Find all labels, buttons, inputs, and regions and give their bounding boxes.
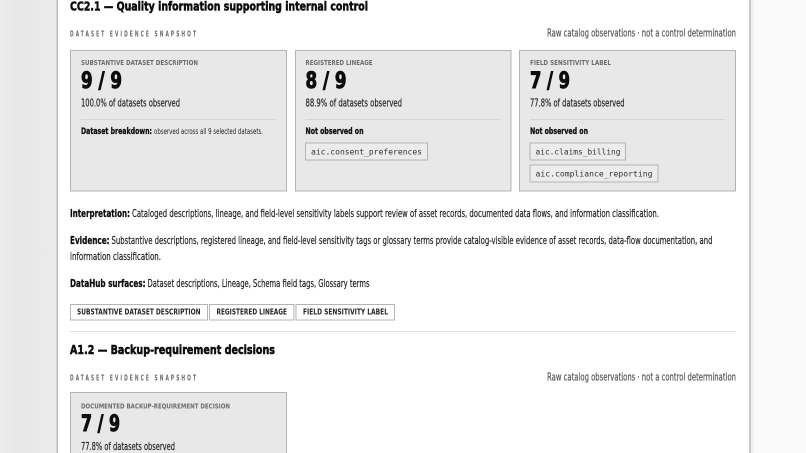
tag: registered lineage: REGISTERED LINEAGE (216, 308, 287, 316)
tag: field sensitivity label: FIELD SENSITIVITY LABEL (303, 308, 388, 316)
metric: 7 / 9 (530, 69, 570, 94)
tag: registered lineage (210, 304, 294, 320)
tag: substantive dataset description (70, 304, 208, 320)
dataset chip (530, 143, 626, 160)
evidence paragraph: information classification. (70, 250, 161, 263)
card label: REGISTERED LINEAGE (306, 59, 373, 67)
interpretation paragraph: Interpretation: (70, 208, 130, 220)
card: substantive dataset description (70, 50, 286, 191)
tag: substantive dataset description: SUBSTANTIVE DATASET DESCRIPTION (77, 308, 200, 316)
datahub surfaces paragraph (70, 277, 370, 290)
section label: dataset evidence snapshot: DATASET EVIDENCE SNAPSHOT (70, 29, 196, 39)
section label: dataset evidence snapshot: DATASET EVIDENCE SNAPSHOT (70, 373, 196, 383)
evidence paragraph (70, 234, 712, 263)
metric percentage: 77.8% of datasets observed (530, 96, 624, 110)
surface tags (70, 304, 394, 320)
dataset chip: aic.consent_preferences (311, 146, 422, 156)
dataset breakdown (81, 127, 263, 137)
datahub surfaces paragraph: Dataset descriptions, Lineage, Schema field tags, Glossary terms (148, 277, 370, 290)
metric percentage: 77.8% of datasets observed (81, 440, 175, 453)
metric: 7 / 9 (81, 412, 120, 437)
metric percentage: 100.0% of datasets observed (81, 96, 180, 110)
card label: DOCUMENTED BACKUP-REQUIREMENT DECISION (81, 402, 230, 410)
dataset chip: aic.compliance_reporting (536, 168, 653, 178)
card: field sensitivity label (520, 50, 736, 191)
card: registered lineage (296, 50, 511, 191)
card label: SUBSTANTIVE DATASET DESCRIPTION (81, 59, 198, 67)
dataset breakdown: observed across all 9 selected datasets. (154, 127, 263, 136)
dataset breakdown: Dataset breakdown: (81, 127, 152, 137)
not observed heading: Not observed on (530, 127, 588, 137)
evidence paragraph: Evidence: (70, 235, 110, 247)
metric: 8 / 9 (306, 69, 346, 94)
not observed heading: Not observed on (306, 127, 364, 137)
card: documented backup-requirement decision (70, 392, 286, 453)
dataset chip (530, 165, 658, 182)
card label: FIELD SENSITIVITY LABEL (530, 59, 611, 67)
datahub surfaces paragraph: DataHub surfaces: (70, 278, 146, 290)
metric: 9 / 9 (81, 69, 122, 94)
tag: field sensitivity label (296, 304, 394, 320)
dataset chip: aic.claims_billing (536, 146, 621, 156)
dataset chip (306, 143, 428, 160)
heading: A1.2: A1.2 — Backup-requirement decisions (70, 342, 275, 357)
metric percentage: 88.9% of datasets observed (306, 96, 402, 110)
